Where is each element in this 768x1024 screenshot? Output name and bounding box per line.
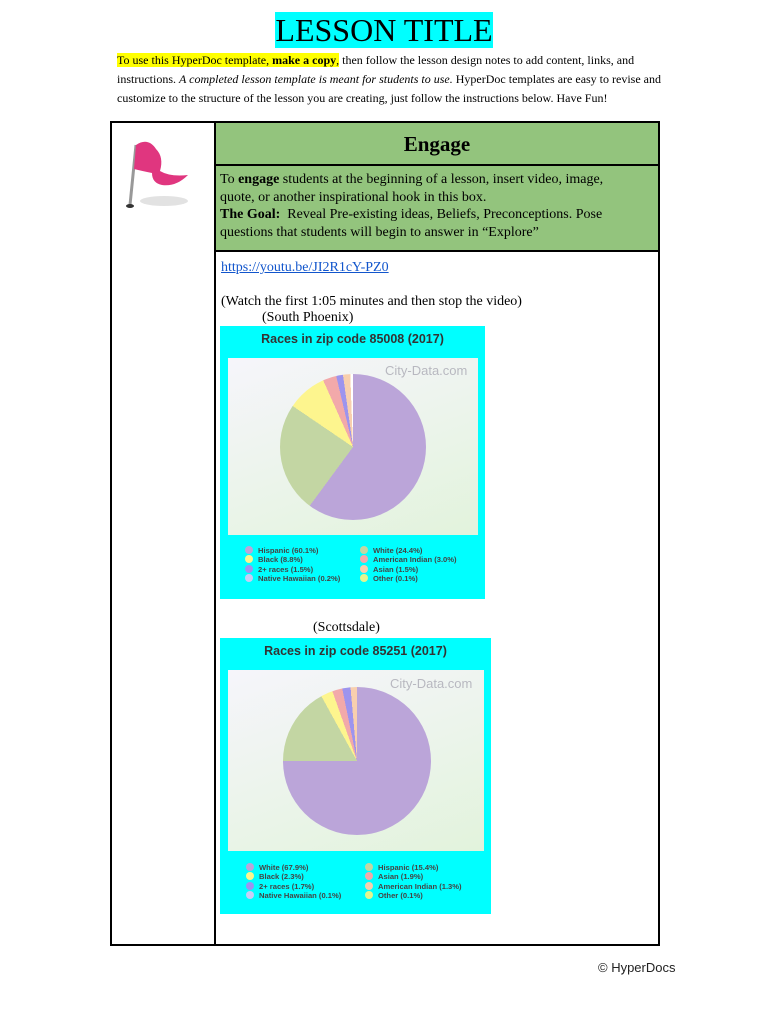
legend: White (67.9%) — [259, 863, 308, 872]
chart: zip 85251: Races in zip code 85251 (2017) — [264, 644, 447, 658]
left column divider — [214, 123, 216, 944]
legend: Native Hawaiian (0.2%) — [258, 574, 340, 583]
engage header — [216, 123, 658, 166]
engage header: Engage — [404, 132, 470, 156]
legend — [245, 546, 340, 583]
engage description: To engage students at the beginning of a lesson, insert video, image, quote, or another inspirational hook in this box. — [220, 172, 603, 204]
legend: Black (2.3%) — [259, 872, 304, 881]
chart: zip 85251 — [220, 638, 491, 914]
chart: zip 85008: City-Data.com — [385, 363, 467, 378]
engage description — [216, 166, 658, 252]
pie — [283, 687, 431, 835]
chart: zip 85008: Races in zip code 85008 (2017) — [261, 332, 444, 346]
legend: Black (8.8%) — [258, 555, 303, 564]
chart: zip 85251: Hispanic (15.4%) — [378, 863, 438, 872]
chart: zip 85251: Asian (1.9%) — [378, 872, 423, 881]
chart: zip 85251: Other (0.1%) — [378, 891, 423, 900]
table — [110, 121, 660, 946]
pie — [280, 374, 426, 520]
legend: Native Hawaiian (0.1%) — [259, 891, 341, 900]
chart: zip 85251: City-Data.com — [390, 676, 472, 691]
legend — [246, 863, 341, 900]
title: LESSON TITLE — [275, 12, 493, 48]
footer credit: © HyperDocs — [598, 960, 676, 975]
chart: zip 85008: White (24.4%) — [373, 546, 422, 555]
chart: zip 85008: Asian (1.5%) — [373, 565, 418, 574]
chart: zip 85008: Other (0.1%) — [373, 574, 418, 583]
video link: https://youtu.be/JI2R1cY-PZ0 — [221, 260, 389, 275]
label: south phoenix: (South Phoenix) — [262, 310, 353, 325]
chart: zip 85008: American Indian (3.0%) — [373, 555, 457, 564]
engage description: The Goal: Reveal Pre-existing ideas, Beliefs, Preconceptions. Pose questions that students will begin to answer in “Explore” — [220, 207, 602, 240]
watch note: (Watch the first 1:05 minutes and then stop the video) — [221, 294, 522, 309]
chart: zip 85008 — [220, 326, 485, 599]
chart: zip 85251: American Indian (1.3%) — [378, 882, 462, 891]
legend: Hispanic (60.1%) — [258, 546, 318, 555]
intro text: To use this HyperDoc template, make a copy, then follow the lesson design notes to add content, links, and instructions. A completed lesson template is meant for students to use. HyperDoc templates are easy to revise and customize to the structure of the lesson you are creating, just follow the instructions below. Have Fun! — [117, 53, 661, 105]
icon: flag — [126, 142, 188, 208]
legend: 2+ races (1.5%) — [258, 565, 313, 574]
label: scottsdale: (Scottsdale) — [313, 620, 380, 635]
legend: 2+ races (1.7%) — [259, 882, 314, 891]
